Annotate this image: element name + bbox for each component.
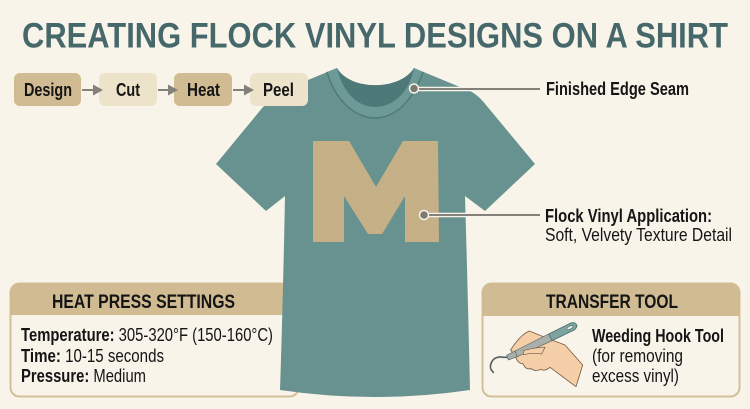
- flock vinyl letter M: [313, 141, 439, 242]
- heat press header band: [10, 283, 299, 315]
- inner neck: [337, 68, 414, 107]
- callout: flock vinyl application: Flock Vinyl Application:: [545, 206, 712, 226]
- step: cut: Cut: [116, 80, 140, 100]
- tool purpose: (for removing: [592, 346, 683, 366]
- collar seam: [327, 72, 423, 118]
- icon: hand holding weeding hook: [490, 323, 583, 387]
- transfer tool header band: [482, 283, 740, 316]
- step: heat: [174, 73, 232, 106]
- panel: transfer tool: [482, 283, 740, 396]
- step: cut: [99, 73, 157, 106]
- panel: process steps: [14, 73, 308, 106]
- shirt body: [216, 68, 535, 397]
- callout: finished edge seam: [410, 79, 689, 99]
- step: peel: [250, 73, 308, 106]
- t-shirt illustration: [216, 68, 535, 397]
- time setting: Time: 10-15 seconds: [21, 346, 164, 366]
- step: design: [14, 73, 81, 106]
- pressure setting: Pressure: Medium: [21, 366, 146, 386]
- temperature setting: Temperature: 305-320°F (150-160°C): [21, 325, 273, 345]
- arrow: design to cut: [82, 84, 103, 96]
- transfer tool heading: TRANSFER TOOL: [546, 291, 678, 313]
- panel: heat press settings: [10, 283, 299, 396]
- step: design: Design: [24, 80, 72, 100]
- arrow: heat to peel: [233, 84, 254, 96]
- callout: finished edge seam: Finished Edge Seam: [546, 79, 689, 99]
- heat press heading: HEAT PRESS SETTINGS: [52, 291, 235, 313]
- step: heat: Heat: [187, 80, 220, 100]
- panel: transfer tool: excess vinyl): [592, 366, 679, 386]
- callout: flock vinyl application: [420, 206, 732, 245]
- arrow: cut to heat: [158, 84, 178, 96]
- step: peel: Peel: [263, 80, 294, 100]
- collar band: [327, 68, 423, 117]
